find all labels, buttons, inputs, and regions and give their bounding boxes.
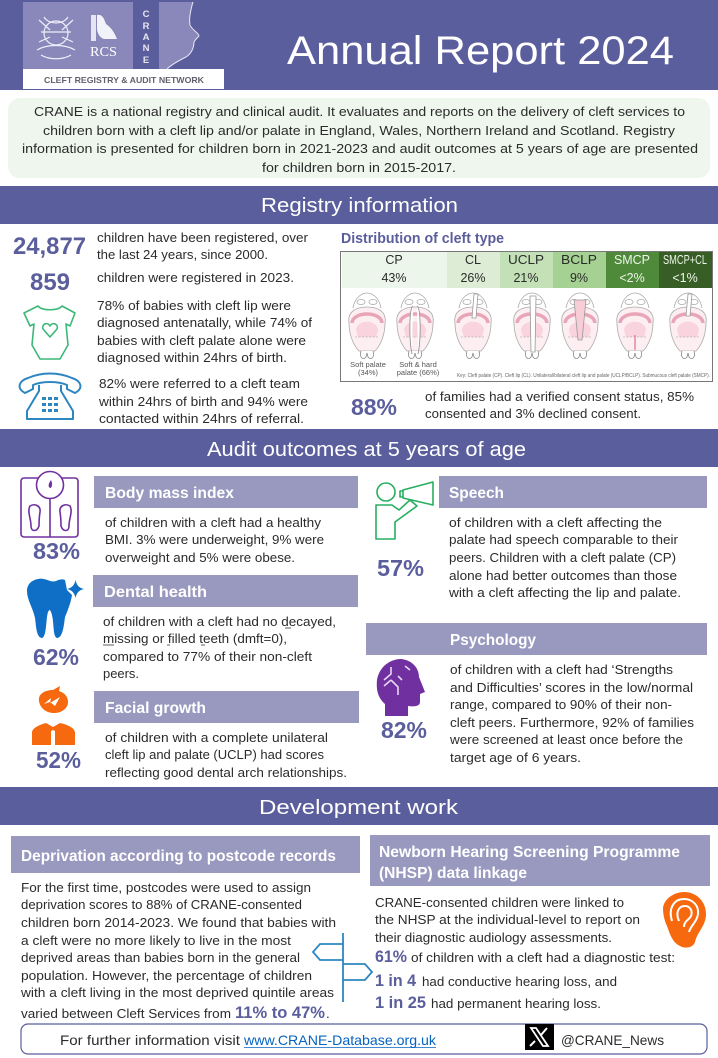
- section band: registry information: Registry information: [261, 194, 458, 217]
- footer panel: @CRANE_News: [561, 1032, 664, 1048]
- section band: development work: Development work: [259, 796, 459, 819]
- panel: facial growth: [94, 691, 359, 780]
- panel: facial growth: cleft lip and palate (UCLP) had scores: [105, 747, 324, 762]
- logo vertical CRANE letters: R: [143, 21, 150, 32]
- panel: psychology: were screened at least once before the: [449, 732, 683, 747]
- panel: speech: alone had better outcomes than those: [449, 568, 677, 583]
- section band: registry information: [0, 186, 718, 224]
- panel: body mass index: of children with a cleft had a healthy: [105, 515, 321, 530]
- panel: dental health: Dental health: [104, 584, 207, 601]
- logo crest RCS: [90, 15, 117, 60]
- stat: 859 children: [30, 269, 294, 296]
- stat: 24,877 children: 24,877: [13, 233, 86, 260]
- icon: tooth: [27, 579, 84, 638]
- chart: cleft type table: SMCP: [614, 253, 650, 267]
- text: diagnosis: [97, 298, 312, 365]
- panel: deprivation: .: [326, 1006, 330, 1021]
- icon: telephone: [20, 374, 80, 419]
- panel: deprivation: For the first time, postcodes were used to assign: [21, 880, 311, 895]
- logo crest left: [37, 17, 75, 59]
- panel: NHSP data linkage: 61%: [375, 947, 407, 966]
- icon: baby onesie: [24, 306, 75, 359]
- chart: cleft type table: BCLP: [561, 253, 597, 267]
- chart: cleft type table: <2%: [619, 271, 645, 285]
- panel: facial growth: of children with a complete unilateral: [105, 730, 328, 745]
- stat: 88% consent: consented and 3% declined consent.: [425, 406, 641, 421]
- intro panel: information is presented for children born in 2021-2023 and audit outcomes at 5 years of age are presented: [22, 141, 698, 156]
- panel: speech: Speech: [449, 485, 504, 502]
- logo crest RCS: RCS: [90, 45, 117, 60]
- panel: NHSP data linkage: had permanent hearing loss.: [431, 996, 601, 1011]
- panel: psychology: range, compared to 90% of their non-: [450, 697, 672, 712]
- panel: body mass index: BMI. 3% were underweight, 9% were: [105, 532, 324, 547]
- panel: NHSP data linkage: Newborn Hearing Screening Programme: [379, 844, 680, 861]
- chart: cleft type table: (34%): [358, 368, 379, 377]
- panel: NHSP data linkage: the NHSP at the individual-level to report on: [375, 912, 640, 927]
- header band: [0, 0, 718, 90]
- heading: distribution of cleft type: Distribution of cleft type: [341, 231, 504, 247]
- chart: cleft type table: Soft palate: [350, 360, 386, 369]
- panel: NHSP data linkage: their diagnostic audiology assessments.: [375, 930, 612, 945]
- stat: 88% consent: [351, 389, 694, 421]
- panel: NHSP data linkage: CRANE-consented children were linked to: [375, 895, 624, 910]
- logo vertical CRANE letters: A: [143, 32, 150, 43]
- section band: development work: [0, 787, 718, 825]
- panel: speech: of children with a cleft affecting the: [449, 515, 662, 530]
- stat: 83%: 83%: [33, 538, 80, 564]
- panel: body mass index: [94, 476, 358, 565]
- chart: cleft type table: 9%: [570, 271, 588, 285]
- panel: deprivation: varied between Cleft Services from: [21, 1006, 231, 1021]
- panel: psychology: cleft peers. Furthermore, 92% of families: [450, 715, 694, 730]
- title: Annual Report 2024: [287, 29, 674, 73]
- panel: NHSP data linkage: 1 in 25: [375, 993, 426, 1012]
- panel: NHSP data linkage: (NHSP) data linkage: [379, 865, 527, 882]
- logo strapline: CLEFT REGISTRY & AUDIT NETWORK: [44, 75, 205, 85]
- stat: 24,877 children: the last 24 years, since 2000.: [97, 247, 268, 262]
- panel: dental health: [93, 575, 358, 681]
- panel: deprivation: children born 2014-2023. We found that babies with: [21, 915, 336, 930]
- intro panel: children born with a cleft lip and/or palate in England, Wales, Northern Ireland and Scotland. Registry: [43, 123, 675, 138]
- text: referral: [98, 376, 308, 426]
- panel: speech: [439, 476, 707, 600]
- panel: speech: peers. Children with a cleft palate (CP): [449, 550, 676, 565]
- panel: speech: palate had speech comparable to their: [449, 532, 679, 547]
- panel: psychology: Psychology: [450, 632, 536, 649]
- panel: NHSP data linkage: of children with a cleft had a diagnostic test:: [411, 950, 675, 965]
- panel: deprivation: a cleft were no more likely to live in the most: [21, 933, 291, 948]
- chart: cleft type table: <1%: [672, 271, 698, 285]
- panel: deprivation: [11, 836, 360, 1022]
- panel: psychology: and Difficulties’ scores in the low/normal: [450, 680, 693, 695]
- text: referral: 82% were referred to a cleft team: [99, 376, 300, 391]
- panel: deprivation: deprived areas than babies born in the general: [21, 950, 300, 965]
- icon: person with megaphone: [376, 482, 433, 539]
- panel: facial growth: reflecting good dental arch relationships.: [105, 765, 347, 780]
- stat: 88% consent: 88%: [351, 394, 397, 420]
- chart: cleft type table: CL: [465, 253, 481, 267]
- logo vertical CRANE letters: E: [143, 55, 149, 66]
- icon: head with brain: [377, 659, 425, 716]
- intro panel: for children born in 2015-2017.: [262, 160, 456, 175]
- panel: facial growth: Facial growth: [105, 700, 206, 717]
- footer panel: www.CRANE-Database.org.uk: [243, 1032, 437, 1048]
- panel: psychology: target age of 6 years.: [450, 750, 581, 765]
- panel: dental health: missing or filled teeth (dmft=0),: [103, 631, 287, 646]
- chart: cleft type table: UCLP: [508, 253, 544, 267]
- panel: NHSP data linkage: [370, 835, 710, 1012]
- panel: deprivation: Deprivation according to postcode records: [21, 848, 336, 865]
- logo: CRANE: [23, 2, 224, 89]
- panel: body mass index: Body mass index: [105, 485, 234, 502]
- text: diagnosis: diagnosed antenatally, while 74% of: [97, 315, 312, 330]
- text: diagnosis: diagnosed within 24hrs of birth.: [97, 350, 287, 365]
- chart: cleft type table: CP: [385, 253, 403, 267]
- panel: dental health: peers.: [103, 666, 139, 681]
- text: referral: contacted within 24hrs of referral.: [99, 411, 304, 426]
- chart: cleft type table: 43%: [381, 271, 407, 285]
- panel: dental health: compared to 77% of their non-cleft: [103, 649, 312, 664]
- chart: cleft type table: palate (66%): [397, 368, 440, 377]
- footer panel: For further information visit: [60, 1032, 240, 1048]
- panel: body mass index: overweight and 5% were obese.: [105, 550, 295, 565]
- panel: deprivation: population. However, the percentage of children: [21, 968, 312, 983]
- icon: weighing scale: [21, 472, 78, 537]
- chart: cleft type table: [340, 252, 712, 382]
- panel: psychology: [366, 623, 707, 765]
- panel: NHSP data linkage: 1 in 4: [375, 971, 417, 990]
- panel: speech: with a cleft affecting the lip and palate.: [448, 585, 681, 600]
- logo vertical CRANE letters: N: [143, 43, 150, 54]
- text: referral: within 24hrs of birth and 94% were: [98, 394, 308, 409]
- logo vertical CRANE letters: C: [143, 9, 150, 20]
- panel: deprivation: with a cleft living in the most deprived quintile areas: [20, 985, 334, 1000]
- panel: psychology: of children with a cleft had ‘Strengths: [450, 662, 673, 677]
- text: diagnosis: babies with cleft palate alone were: [97, 333, 306, 348]
- stat: 88% consent: of families had a verified consent status, 85%: [425, 389, 694, 404]
- text: diagnosis: 78% of babies with cleft lip were: [97, 298, 291, 313]
- section band: audit outcomes: [0, 429, 718, 467]
- stat: 57%: 57%: [377, 555, 424, 581]
- stat: 24,877 children: children have been registered, over: [97, 230, 309, 245]
- stat: 24,877 children: [13, 230, 309, 262]
- intro panel: CRANE is a national registry and clinical audit. It evaluates and reports on the delivery of cleft services to: [34, 104, 685, 119]
- chart: cleft type table: 26%: [460, 271, 486, 285]
- stat: 62%: 62%: [33, 644, 79, 670]
- footer panel: [21, 1024, 707, 1054]
- panel: dental health: of children with a cleft had no decayed,: [103, 614, 336, 629]
- logo vertical CRANE letters: [143, 9, 150, 66]
- icon: X logo: [525, 1024, 554, 1050]
- panel: deprivation: 11% to 47%: [235, 1003, 325, 1022]
- chart: cleft type table: Soft & hard: [399, 360, 437, 369]
- icon: ear: [663, 892, 706, 948]
- section band: audit outcomes: Audit outcomes at 5 years of age: [207, 438, 526, 461]
- intro panel: [8, 98, 710, 178]
- panel: NHSP data linkage: had conductive hearing loss, and: [422, 974, 617, 989]
- stat: 52%: 52%: [36, 747, 81, 773]
- panel: deprivation: deprivation scores to 88% of CRANE-consented: [21, 897, 302, 912]
- icon: signpost: [313, 933, 372, 1002]
- stat: 859 children: children were registered in 2023.: [97, 270, 294, 285]
- icon: child face: [32, 686, 75, 745]
- stat: 82%: 82%: [381, 717, 427, 743]
- chart: cleft type table: 21%: [513, 271, 539, 285]
- stat: 859 children: 859: [30, 269, 70, 296]
